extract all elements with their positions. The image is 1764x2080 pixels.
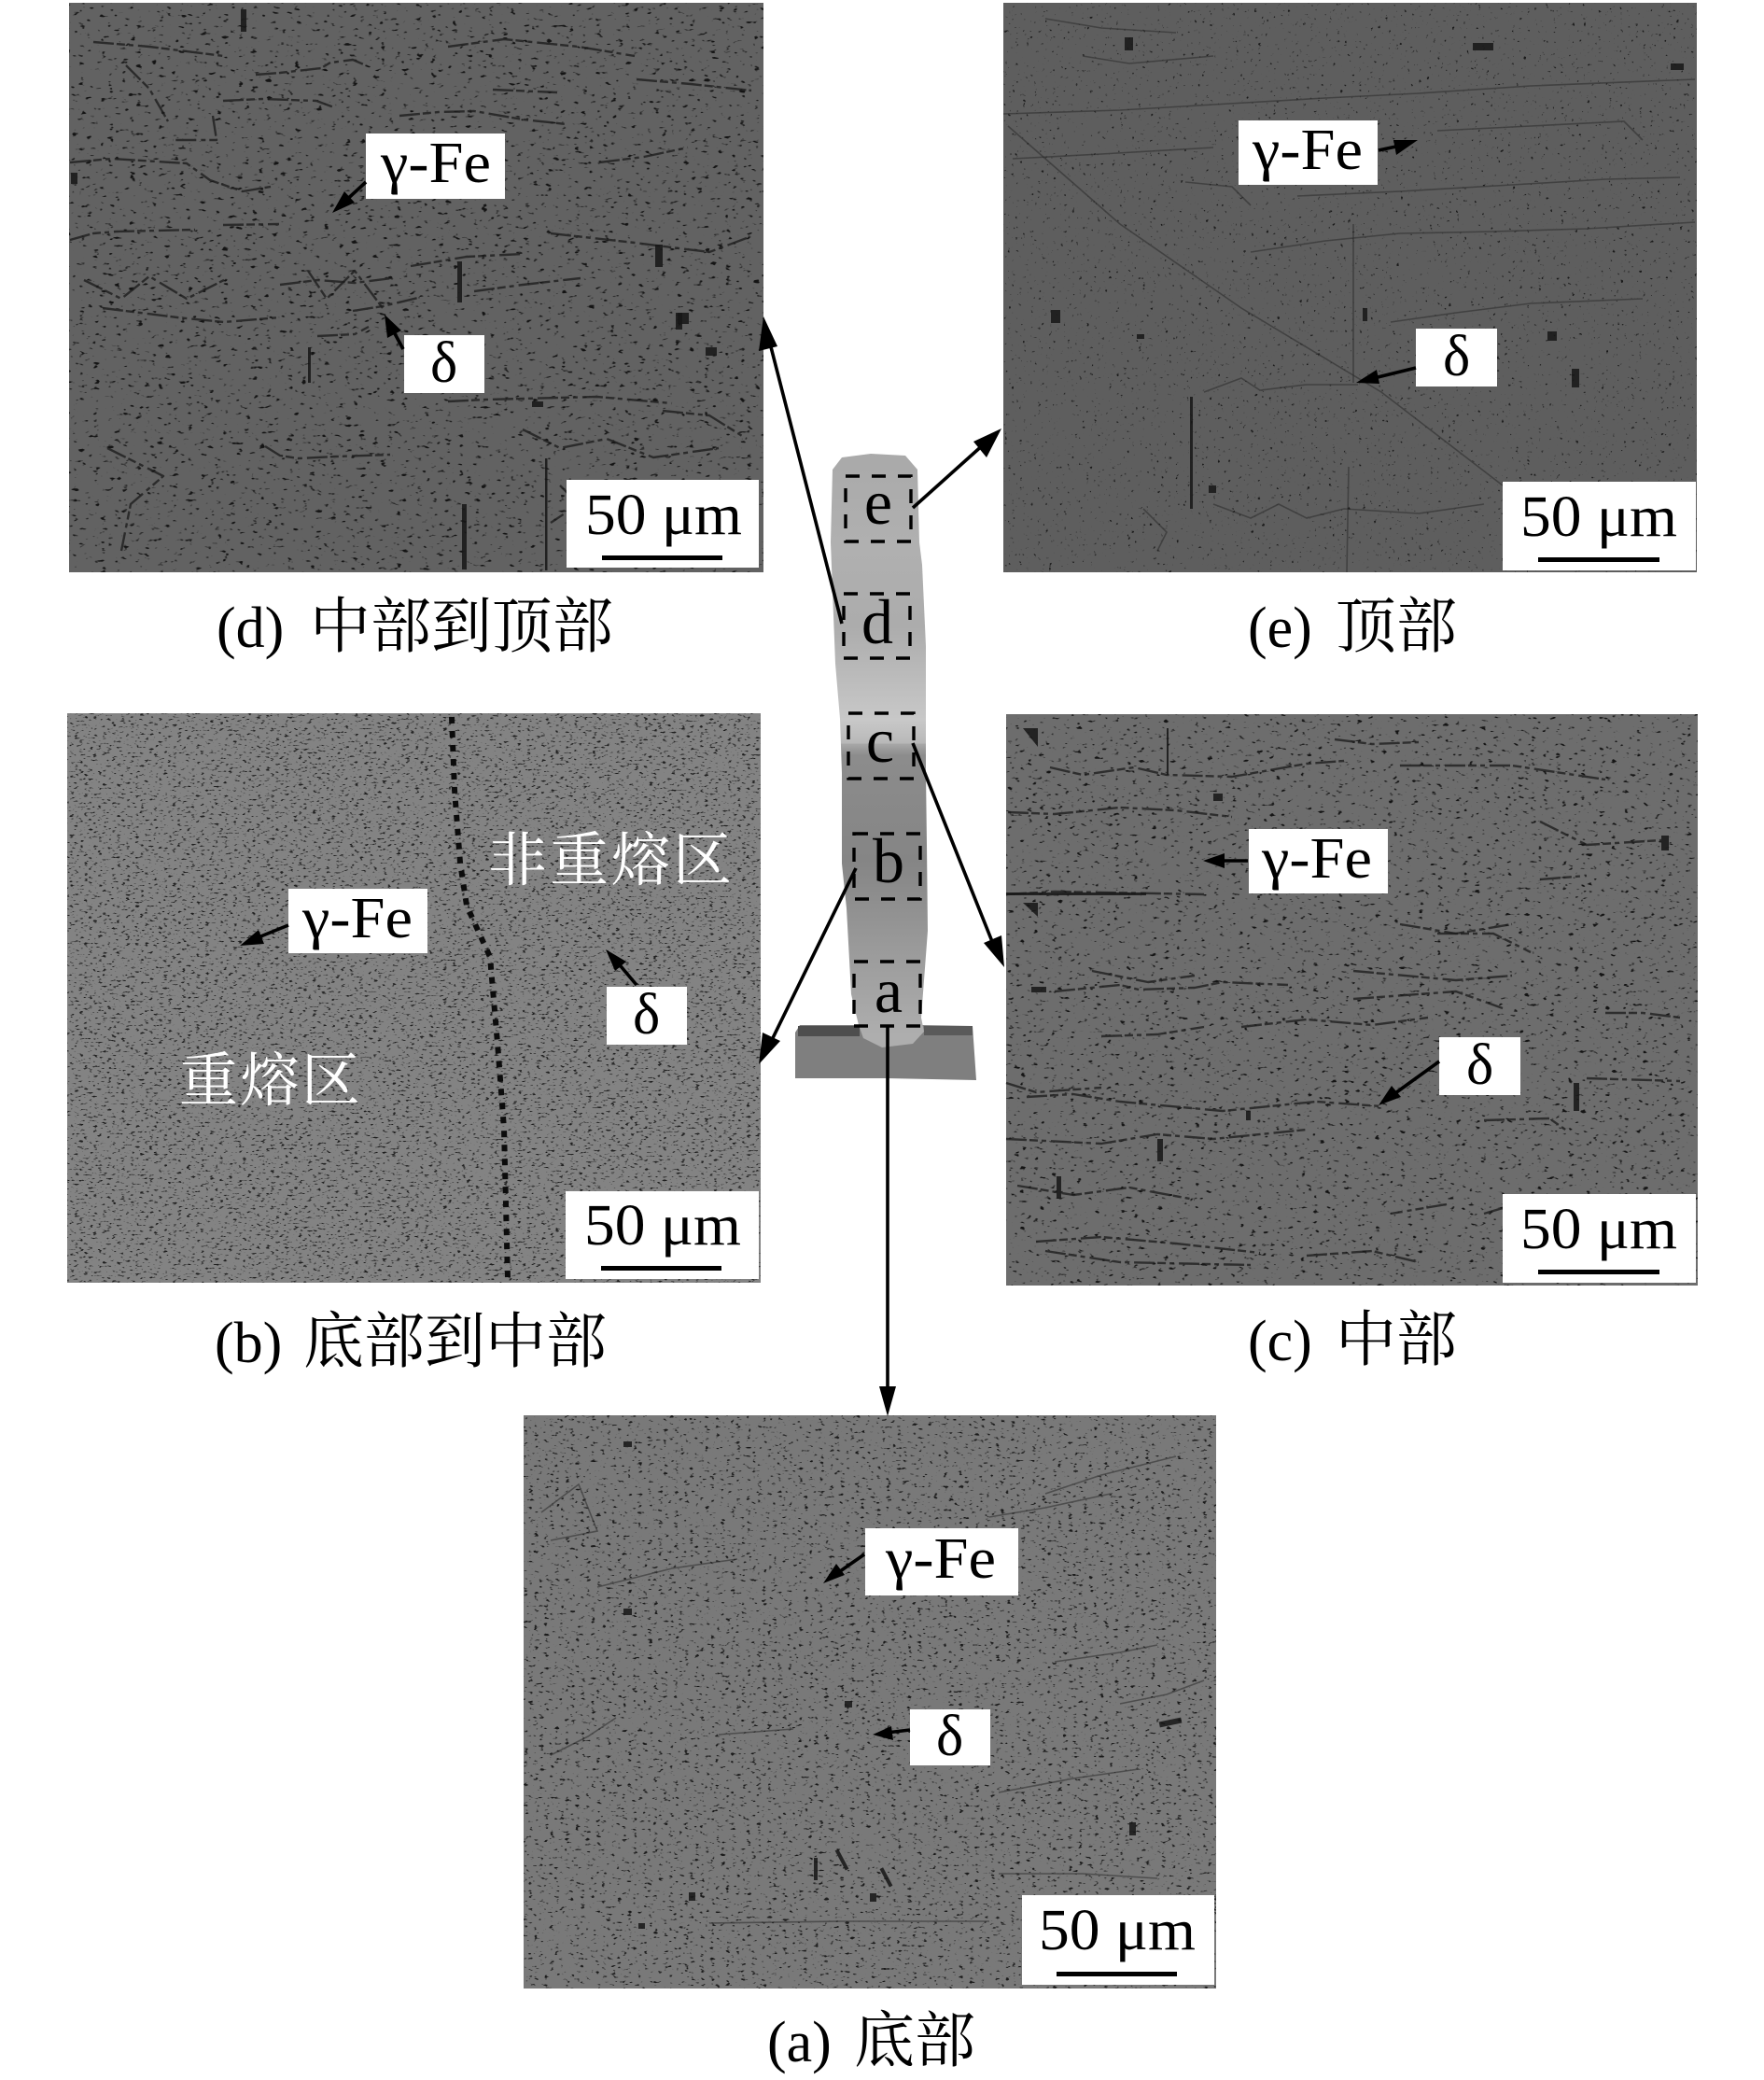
panel: (a) micrograph, bottom bbox=[524, 1415, 1216, 1989]
label box: delta a bbox=[910, 1705, 990, 1768]
arrow: delta c bbox=[1379, 1061, 1439, 1105]
arrow: delta b bbox=[606, 949, 637, 985]
arrow: region d to panel d bbox=[759, 316, 842, 624]
dark pits c bbox=[1006, 728, 1669, 1199]
scale bar d bbox=[567, 480, 759, 568]
micrograph background a bbox=[524, 1415, 1216, 1989]
caption c: 中部 bbox=[1336, 1290, 1457, 1378]
micrograph texture c bbox=[1006, 714, 1698, 1286]
arrow: gamma-Fe d bbox=[332, 182, 366, 213]
scale bar e: 50 μm bbox=[1520, 485, 1677, 549]
arrow: gamma-Fe a bbox=[823, 1554, 864, 1583]
panel: (b) micrograph, bottom to middle bbox=[67, 713, 761, 1283]
caption d: (d) bbox=[217, 597, 284, 660]
arrow: delta e bbox=[1356, 368, 1416, 384]
sample region a bbox=[854, 955, 920, 1026]
scale bar c: 50 μm bbox=[1520, 1198, 1677, 1261]
scale bar a bbox=[1022, 1895, 1214, 1985]
label: non-remelted zone: 非重熔区 bbox=[488, 813, 732, 898]
panel: (c) micrograph, middle bbox=[1006, 714, 1698, 1286]
arrow: region e to panel e bbox=[913, 429, 1001, 508]
arrow: gamma-Fe e bbox=[1379, 140, 1418, 155]
panel: (d) micrograph, middle to top bbox=[69, 3, 763, 572]
dark pits d bbox=[71, 9, 717, 570]
caption b: (b) bbox=[215, 1312, 282, 1375]
label box: delta c: δ bbox=[1466, 1033, 1493, 1097]
caption a: 底部 bbox=[854, 1991, 975, 2079]
label box: gamma-Fe b: γ-Fe bbox=[301, 887, 413, 950]
sample region d bbox=[844, 586, 910, 658]
caption d: 中部到顶部 bbox=[310, 577, 613, 665]
label box: delta b: δ bbox=[633, 983, 660, 1047]
label box: gamma-Fe d: γ-Fe bbox=[380, 132, 491, 195]
label box: delta c bbox=[1439, 1033, 1520, 1097]
dark pits a bbox=[623, 1441, 1182, 1929]
sample region b bbox=[854, 825, 920, 899]
label box: delta e: δ bbox=[1443, 325, 1470, 388]
sample region b: b bbox=[873, 825, 904, 896]
caption e: (e) bbox=[1248, 597, 1312, 660]
specimen flange bbox=[795, 1025, 976, 1080]
caption e: 顶部 bbox=[1336, 577, 1457, 665]
micrograph texture a bbox=[524, 1415, 1216, 1989]
dendrite network e bbox=[1003, 19, 1695, 572]
label box: gamma-Fe e: γ-Fe bbox=[1252, 119, 1363, 182]
specimen: wall sample with base bbox=[795, 454, 976, 1080]
specimen stem bbox=[831, 454, 928, 1047]
arrow: delta a bbox=[873, 1726, 910, 1740]
scale bar c bbox=[1503, 1194, 1696, 1283]
micrograph background d bbox=[69, 3, 763, 572]
dendrite network c bbox=[1006, 739, 1680, 1265]
arrow: region b to panel b bbox=[759, 868, 856, 1064]
sample region c bbox=[848, 705, 914, 779]
scale bar e bbox=[1503, 482, 1696, 570]
label box: gamma-Fe c: γ-Fe bbox=[1261, 827, 1372, 891]
label box: gamma-Fe a: γ-Fe bbox=[885, 1527, 996, 1591]
micrograph background e bbox=[1003, 3, 1697, 572]
arrow: region c to panel c bbox=[913, 743, 1004, 967]
arrow: gamma-Fe c bbox=[1203, 853, 1248, 868]
arrow: gamma-Fe b bbox=[240, 925, 288, 946]
sample region a: a bbox=[875, 955, 903, 1026]
sample region e bbox=[846, 467, 911, 541]
arrow: region a to panel a bbox=[879, 1025, 896, 1416]
caption c: (c) bbox=[1248, 1310, 1312, 1373]
dendrite network a bbox=[541, 1456, 1204, 1923]
remelting boundary dotted line bbox=[452, 717, 508, 1279]
sample region e: e bbox=[864, 467, 892, 538]
dark pits e bbox=[1051, 37, 1684, 509]
micrograph background b bbox=[67, 713, 761, 1283]
label box: delta d bbox=[404, 331, 484, 395]
label box: gamma-Fe d bbox=[366, 132, 505, 199]
scale bar b: 50 μm bbox=[584, 1194, 741, 1258]
sample region c: c bbox=[866, 705, 894, 776]
caption a: (a) bbox=[767, 2011, 832, 2074]
panel: (e) micrograph, top bbox=[1003, 3, 1697, 572]
caption b: 底部到中部 bbox=[303, 1292, 607, 1380]
label box: gamma-Fe a bbox=[865, 1527, 1018, 1595]
scale bar d: 50 μm bbox=[585, 484, 742, 547]
label box: delta e bbox=[1416, 325, 1497, 388]
arrow: delta d bbox=[385, 315, 403, 349]
label box: delta d: δ bbox=[430, 331, 457, 395]
dendrite network d bbox=[70, 39, 751, 551]
sample region d: d bbox=[861, 586, 893, 657]
label: remelted zone: 重熔区 bbox=[179, 1033, 360, 1118]
micrograph texture d bbox=[69, 3, 763, 572]
label box: delta b bbox=[607, 983, 687, 1047]
micrograph texture b bbox=[67, 713, 761, 1283]
scale bar b bbox=[566, 1191, 759, 1279]
micrograph texture e bbox=[1003, 3, 1697, 572]
scale bar a: 50 μm bbox=[1039, 1899, 1196, 1962]
label box: delta a: δ bbox=[936, 1705, 963, 1768]
micrograph background c bbox=[1006, 714, 1698, 1286]
